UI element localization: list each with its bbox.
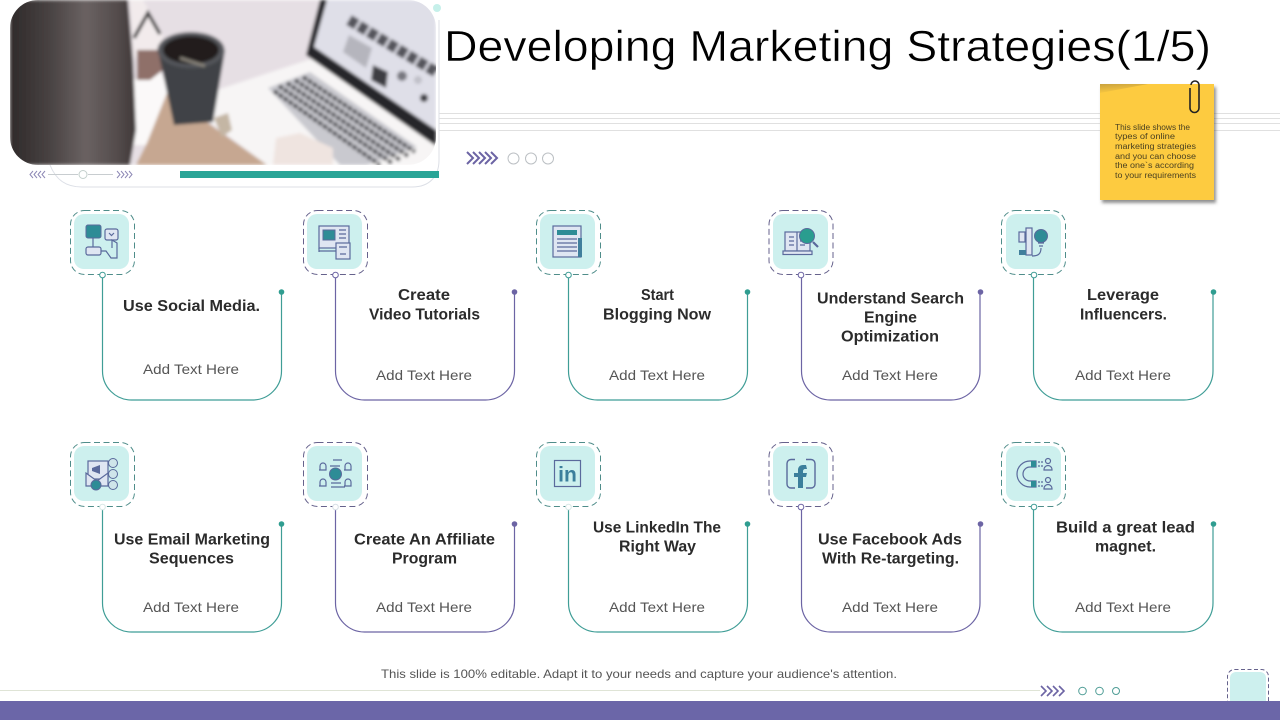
card: Start Blogging Now: Add Text Here	[609, 367, 705, 383]
card: Create Video Tutorials: Create	[398, 287, 450, 304]
icon: blog page	[553, 226, 582, 257]
icon: magnet with leads	[1017, 458, 1052, 489]
card: Use LinkedIn The Right Way: Use LinkedIn The	[593, 520, 721, 536]
card: Use Social Media: Use Social Media.	[123, 298, 260, 315]
card: Use Facebook Ads With Re-targeting: Use Facebook Ads	[818, 532, 962, 548]
slider ornament under photo	[30, 170, 132, 178]
card: Use Facebook Ads With Re-targeting	[769, 442, 983, 632]
card: Build a great lead magnet	[1002, 442, 1216, 632]
card: Use LinkedIn The Right Way: Right Way	[619, 538, 696, 556]
card: Create An Affiliate Program	[304, 442, 517, 632]
sticky note text	[1115, 123, 1197, 180]
header decorative lines	[439, 114, 1280, 130]
card: Use Social Media: Add Text Here	[143, 361, 239, 377]
card: Leverage Influencers	[1002, 210, 1216, 400]
title: Developing Marketing Strategies(1/5)	[444, 22, 1211, 71]
card: Understand Search Engine Optimization: Engine	[864, 310, 917, 326]
card: Create Video Tutorials	[304, 210, 517, 400]
teal accent bar	[180, 171, 439, 178]
icon: paperclip	[1190, 81, 1199, 112]
footer bar	[0, 701, 1280, 720]
sticky note text: types of online	[1115, 132, 1176, 141]
card: Use LinkedIn The Right Way: Add Text Here	[609, 599, 705, 615]
card: Understand Search Engine Optimization: Add Text Here	[842, 367, 938, 383]
card: Leverage Influencers: Add Text Here	[1075, 367, 1171, 383]
sticky note text: the one`s according	[1115, 161, 1194, 170]
card: Understand Search Engine Optimization	[769, 210, 983, 400]
sticky note	[1100, 81, 1214, 200]
card: Create Video Tutorials: Video Tutorials	[369, 306, 480, 324]
card: Create An Affiliate Program: Program	[392, 550, 457, 568]
photo frame	[50, 20, 439, 187]
card: Use Facebook Ads With Re-targeting: Add Text Here	[842, 599, 938, 615]
icon: influencer lightbulb	[1019, 228, 1048, 256]
sticky note text: to your requirements	[1115, 171, 1196, 180]
sticky note text: and you can choose	[1115, 152, 1197, 161]
card: Use LinkedIn The Right Way	[536, 442, 750, 632]
icon: Facebook	[787, 460, 815, 488]
card: Build a great lead magnet: Add Text Here	[1075, 599, 1171, 615]
card: Use Email Marketing Sequences: Use Email Marketing	[114, 532, 270, 548]
photo: person with cup at laptop	[10, 0, 436, 165]
card: Use Email Marketing Sequences: Add Text Here	[143, 599, 239, 615]
card: Leverage Influencers: Influencers.	[1080, 306, 1167, 324]
card: Understand Search Engine Optimization: Optimization	[841, 328, 939, 346]
icon: LinkedIn	[554, 460, 580, 486]
card: Use Email Marketing Sequences: Sequences	[149, 550, 234, 568]
icon: affiliate network	[319, 460, 351, 487]
sticky note text: This slide shows the	[1115, 123, 1191, 132]
card: Understand Search Engine Optimization: Understand Search	[817, 290, 964, 308]
footer note: This slide is 100% editable. Adapt it to your needs and capture your audience's attention.	[381, 667, 897, 681]
card: Start Blogging Now: Start	[641, 287, 675, 304]
icon: social media	[86, 225, 118, 258]
card: Start Blogging Now	[536, 210, 750, 400]
card: Use Social Media	[70, 210, 284, 400]
card: Create An Affiliate Program: Create An Affiliate	[354, 532, 495, 548]
card: Start Blogging Now: Blogging Now	[603, 306, 712, 324]
card: Build a great lead magnet: Build a great lead	[1056, 520, 1195, 536]
footer chevrons and dots	[1041, 686, 1120, 696]
card: Leverage Influencers: Leverage	[1087, 287, 1159, 304]
icon: email marketing	[86, 458, 118, 490]
decoration dot	[433, 4, 441, 12]
footer line	[0, 690, 1040, 692]
icon: search optimization	[783, 228, 818, 254]
card: Create Video Tutorials: Add Text Here	[376, 367, 472, 383]
icon: video tutorials	[319, 226, 350, 259]
page number tile	[1228, 670, 1268, 710]
sticky note text: marketing strategies	[1115, 142, 1196, 151]
card: Use Facebook Ads With Re-targeting: With Re-targeting.	[822, 550, 959, 568]
header chevrons and dots	[467, 152, 554, 164]
card: Create An Affiliate Program: Add Text Here	[376, 599, 472, 615]
card: Use Email Marketing Sequences	[70, 442, 284, 632]
card: Build a great lead magnet: magnet.	[1095, 538, 1156, 556]
icon: LinkedIn: in	[558, 464, 577, 486]
